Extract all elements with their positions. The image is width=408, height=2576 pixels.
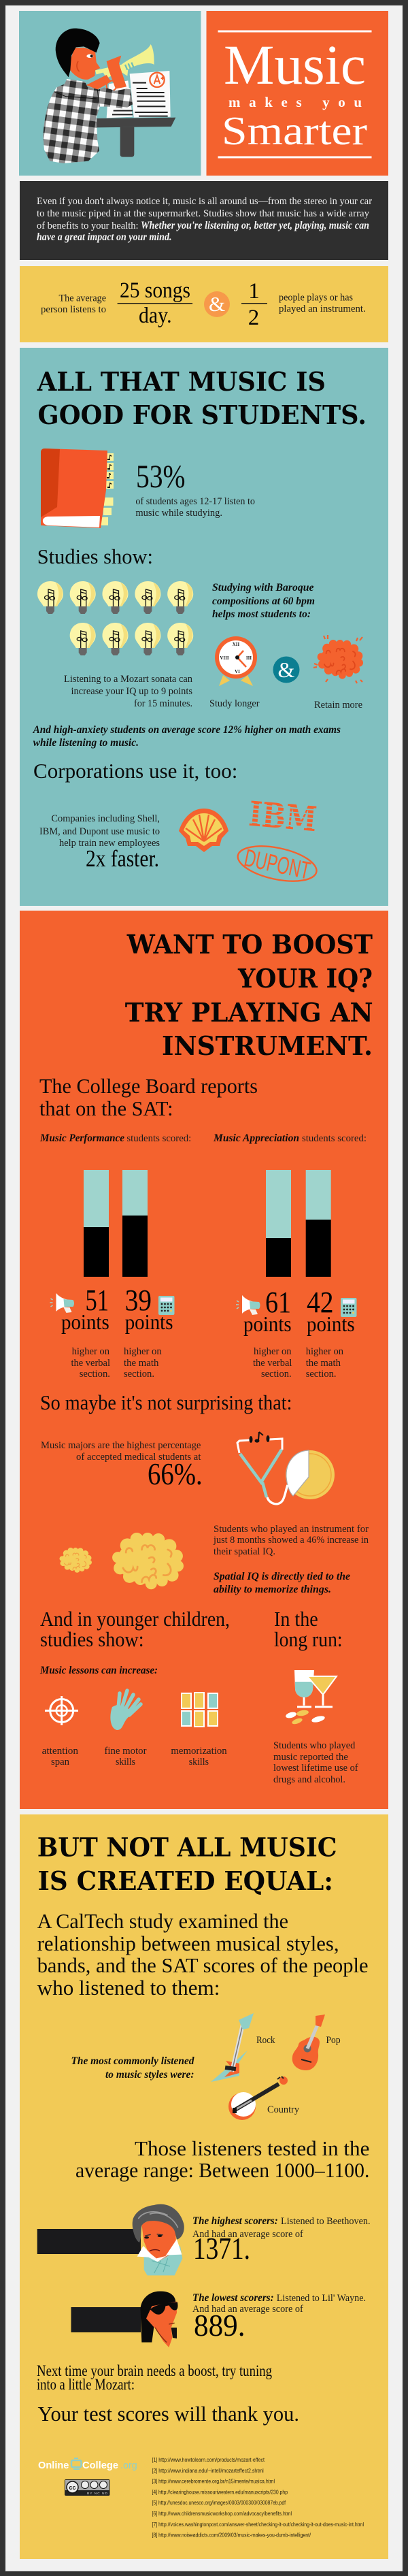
illustration: boy playing trumpet xyxy=(43,29,175,163)
stat: 42 points: the math xyxy=(306,1358,341,1369)
text: memorization: memorization xyxy=(171,1746,227,1757)
stat: 53% xyxy=(135,459,255,519)
panel: stats xyxy=(20,266,388,342)
text: plays instrument xyxy=(279,293,366,314)
text: high anxiety: And high-anxiety students on average score 12% higher on math exams xyxy=(33,724,341,736)
logo: OnlineCollege.org: .org xyxy=(120,2460,137,2471)
icon: clock: XII xyxy=(233,642,240,647)
text: spatial IQ: just 8 months showed a 46% increase in xyxy=(213,1535,369,1546)
heading: long run: long run: xyxy=(274,1627,343,1651)
references: [2] http://www.indiana.edu/~intell/mozarteffect2.shtml xyxy=(152,2468,264,2474)
panel: intro xyxy=(20,181,388,260)
panel: good for students xyxy=(20,348,388,906)
heading: corporations: Corporations use it, too: xyxy=(33,759,237,783)
stat: 51 points: the verbal xyxy=(71,1358,110,1369)
text: Baroque: Studying with Baroque xyxy=(212,582,314,593)
icon: pop guitar xyxy=(292,2015,325,2070)
text: spatial IQ: their spatial IQ. xyxy=(214,1546,275,1557)
text: lowest scorers: Listened to Lil' Wayne. xyxy=(277,2293,366,2304)
panel: header illustration xyxy=(19,11,201,176)
badge: creative commons xyxy=(65,2479,110,2496)
text: study longer: Study longer xyxy=(209,698,260,709)
badge: creative commons: BY NC ND xyxy=(87,2492,108,2496)
heading: College Board xyxy=(39,1074,258,1120)
icon: ampersand: & xyxy=(209,292,225,316)
icon: banjo xyxy=(228,2076,288,2120)
heading: BUT NOT ALL MUSIC xyxy=(37,1832,337,1863)
references: [8] http://www.noiseaddicts.com/2009/03/music-makes-you-dumb-intelligent/ xyxy=(152,2532,311,2539)
icon: clock: III xyxy=(246,655,252,661)
heading: long run xyxy=(274,1607,343,1651)
illustration: Lil Wayne xyxy=(141,2292,177,2347)
stat: 42 points: points xyxy=(307,1311,355,1336)
heading: GOOD FOR STUDENTS. xyxy=(38,400,367,430)
text: average range: Those listeners tested in the xyxy=(135,2136,369,2160)
references: [7] http://voices.washingtonpost.com/answer-sheet/checking-it-out/checking-it-out-does-music-int.html xyxy=(152,2522,364,2528)
icon: small brain xyxy=(59,1548,92,1573)
text: appreciation label xyxy=(213,1132,367,1144)
text: fine motor xyxy=(105,1746,147,1767)
stat: 39 points: the math xyxy=(124,1358,159,1369)
text: Mozart sonata xyxy=(64,674,192,709)
stat: 39 points: points xyxy=(125,1309,173,1334)
text: music majors: of accepted medical students at xyxy=(76,1452,201,1463)
icon: target xyxy=(45,1696,78,1725)
text: CalTech: who listened to them: xyxy=(37,1976,220,2000)
fraction: 25 songs per day: day. xyxy=(139,304,172,328)
heading: TRY PLAYING AN xyxy=(125,997,373,1028)
heading: INSTRUMENT. xyxy=(162,1030,373,1061)
stat: 42 points: section. xyxy=(306,1369,336,1380)
text: plays instrument: played an instrument. xyxy=(279,304,366,314)
text: high anxiety: while listening to music. xyxy=(33,737,139,749)
icon: clock: VIII xyxy=(220,655,229,661)
text: attention span: span xyxy=(51,1757,69,1767)
bar: Lil Wayne score xyxy=(71,2307,141,2332)
text: spatial IQ: ability to memorize things. xyxy=(214,1584,331,1595)
text: music majors: Music majors are the highest percentage xyxy=(41,1440,201,1451)
text: average person xyxy=(41,293,106,315)
text: common styles: The most commonly listened xyxy=(71,2055,194,2067)
text: memorization: skills xyxy=(189,1757,209,1767)
text: lifetime use: drugs and alcohol. xyxy=(273,1774,345,1785)
heading: ALL THAT MUSIC IS xyxy=(37,366,326,397)
icon: stethoscope and pie xyxy=(237,1432,335,1504)
text: country: Country xyxy=(267,2104,299,2115)
bar: Beethoven score xyxy=(37,2229,141,2254)
stat: 39 points: higher on xyxy=(124,1346,162,1357)
icon: calculator xyxy=(158,1296,174,1315)
stat: 61 points: the verbal xyxy=(253,1358,292,1369)
text: average person: person listens to xyxy=(41,304,106,315)
icon: megaphone xyxy=(50,1293,74,1313)
text: common styles xyxy=(71,2055,194,2081)
stat: 61 points: points xyxy=(243,1311,292,1336)
text: appreciation label: students scored: xyxy=(302,1133,367,1144)
stat: 39 points xyxy=(124,1284,173,1380)
illustration: Beethoven xyxy=(133,2204,184,2275)
logo: OnlineCollege.org xyxy=(38,2458,137,2471)
text: music majors xyxy=(41,1440,203,1491)
panel: title xyxy=(207,11,388,176)
icon: Shell logo xyxy=(179,809,228,852)
text: lowest scorers: 889. xyxy=(194,2308,245,2343)
bar chart: SAT scores xyxy=(84,1170,331,1277)
heading: younger children xyxy=(40,1607,230,1651)
text: Baroque: helps most students to: xyxy=(212,608,311,620)
text: performance label: students scored: xyxy=(126,1133,191,1144)
stat: 61 points: higher on xyxy=(254,1346,292,1357)
references xyxy=(152,2457,364,2539)
icon: calculator xyxy=(341,1298,356,1317)
panel: intro: Whether you're listening or, better yet, playing, music can xyxy=(141,220,369,231)
text: spatial IQ xyxy=(213,1524,369,1595)
text: CalTech: A CalTech study examined the xyxy=(37,1909,288,1933)
icon: megaphone xyxy=(236,1295,260,1315)
stat: 51 points xyxy=(61,1284,110,1380)
stat: 53%: of students ages 12-17 listen to xyxy=(135,496,255,507)
text: average range xyxy=(75,2136,369,2182)
icon: DuPont logo xyxy=(235,840,320,887)
stat: 42 points: 42 xyxy=(307,1286,334,1319)
text: Baroque xyxy=(212,582,315,620)
icon: light bulbs xyxy=(37,581,193,655)
text: next time: Next time your brain needs a boost, try tuning xyxy=(37,2362,272,2379)
text: lifetime use: Students who played xyxy=(273,1740,356,1751)
text: spatial IQ: Spatial IQ is directly tied to the xyxy=(214,1571,350,1582)
text: companies: Companies including Shell, xyxy=(51,813,160,824)
text: attention span: attention xyxy=(42,1746,78,1757)
text: CalTech: relationship between musical styles, xyxy=(37,1931,339,1955)
icon: clock: VI xyxy=(235,669,240,674)
heading: studies show: Studies show: xyxy=(37,544,153,568)
stat: 53%: music while studying. xyxy=(135,508,222,519)
text: lowest scorers xyxy=(192,2292,366,2343)
panel: not all music xyxy=(20,1814,388,2559)
text: attention span xyxy=(42,1746,78,1767)
text: companies: help train new employees xyxy=(59,838,160,849)
heading: WANT TO BOOST xyxy=(126,929,373,960)
icon: ampersand xyxy=(273,656,299,683)
badge: creative commons: cc xyxy=(69,2484,76,2491)
panel: boost your IQ xyxy=(20,911,388,1809)
stat: 53%: 53% xyxy=(136,459,185,495)
stat: 39 points: section. xyxy=(124,1369,154,1380)
stat: 42 points: higher on xyxy=(306,1346,343,1357)
logo: OnlineCollege.org: Online xyxy=(38,2460,69,2471)
heading: long run: In the xyxy=(274,1607,318,1631)
references: [1] http://www.howtolearn.com/products/mozart-effect xyxy=(152,2457,265,2463)
text: test scores: Your test scores will thank you. xyxy=(38,2402,299,2426)
icon: DuPont logo: DUPONT xyxy=(242,843,313,885)
text: CalTech xyxy=(37,1909,368,2000)
text: memorization xyxy=(171,1746,227,1767)
icon: rock guitar xyxy=(211,2013,254,2082)
text: performance label: Music Performance xyxy=(39,1132,124,1144)
text: Mozart sonata: increase your IQ up to 9 points xyxy=(71,686,192,697)
text: Baroque: compositions at 60 bpm xyxy=(212,596,315,607)
text: high anxiety xyxy=(33,724,341,749)
stat: 51 points: points xyxy=(61,1309,109,1334)
text: lifetime use xyxy=(273,1740,358,1785)
text: appreciation label: Music Appreciation xyxy=(213,1132,299,1144)
text: Mozart sonata: for 15 minutes. xyxy=(134,698,192,709)
panel: intro: of benefits to your health: xyxy=(37,221,139,231)
heading xyxy=(125,929,373,1061)
text: highest scorers xyxy=(192,2215,371,2266)
text: spatial IQ: Students who played an instrument for xyxy=(214,1524,369,1535)
stat: 39 points: 39 xyxy=(125,1284,152,1317)
fraction: one half: 1 xyxy=(248,279,260,304)
text: highest scorers: The highest scorers: xyxy=(192,2215,278,2227)
text: music majors: 66%. xyxy=(148,1456,203,1491)
fraction: 25 songs per day: 25 songs xyxy=(120,278,190,303)
heading xyxy=(37,1832,337,1896)
references: [6] http://www.childrensmusicworkshop.com/advocacy/benefits.html xyxy=(152,2511,292,2517)
text: lifetime use: music reported the xyxy=(273,1752,348,1763)
subtitle: makes you: makes you xyxy=(228,94,362,110)
icon: ampersand xyxy=(204,291,230,317)
icon: brain xyxy=(313,635,363,683)
text: fine motor: fine motor xyxy=(105,1746,147,1757)
text: retain more: Retain more xyxy=(314,700,362,711)
text: companies: IBM, and Dupont use music to xyxy=(39,826,160,837)
text: lowest scorers: And had an average score of xyxy=(192,2304,303,2315)
panel: intro: to the music piped in at the supermarket. Studies show that music has a wide array xyxy=(37,208,369,219)
text: average range: average range: Between 1000–1100. xyxy=(75,2158,369,2182)
heading: younger children: And in younger children, xyxy=(40,1607,230,1631)
title: Smarter: Smarter xyxy=(222,108,367,153)
stat: 51 points: 51 xyxy=(86,1284,109,1317)
heading: IS CREATED EQUAL: xyxy=(38,1865,333,1896)
stat: 61 points: section. xyxy=(261,1369,292,1380)
fraction: one half: 2 xyxy=(248,306,259,330)
panel: intro: have a great impact on your mind. xyxy=(37,231,171,243)
stat: 61 points: 61 xyxy=(265,1286,291,1319)
stat: 51 points: section. xyxy=(80,1369,110,1380)
text: average person: The average xyxy=(58,293,106,304)
icon: IBM logo: IBM xyxy=(248,794,318,839)
heading: so maybe: So maybe it's not surprising that: xyxy=(40,1390,292,1414)
stat: 42 points xyxy=(306,1286,355,1380)
references: [4] http://clearinghouse.missouriwestern.edu/manuscripts/230.php xyxy=(152,2489,288,2495)
heading: younger children: studies show: xyxy=(40,1627,144,1651)
fraction: one half xyxy=(241,279,267,330)
text: highest scorers: Listened to Beethoven. xyxy=(281,2216,371,2227)
panel: intro: Even if you don't always notice it, music is all around us—from the stereo in your car xyxy=(37,196,372,207)
references: [3] http://www.cerebromente.org.br/n15/mente/musica.html xyxy=(152,2479,275,2485)
text: CalTech: bands, and the SAT scores of the people xyxy=(37,1953,368,1977)
text: highest scorers: 1371. xyxy=(193,2231,250,2266)
text: companies: 2x faster. xyxy=(86,845,159,872)
text: Mozart sonata: Listening to a Mozart sonata can xyxy=(64,674,192,685)
text: lessons: Music lessons can increase: xyxy=(39,1665,158,1676)
text: plays instrument: people plays or has xyxy=(279,293,353,304)
text: companies xyxy=(39,813,160,872)
text: highest scorers: And had an average score of xyxy=(192,2229,303,2240)
title: Music: Music xyxy=(224,33,366,96)
icon: ampersand: & xyxy=(278,657,295,682)
fraction: 25 songs per day xyxy=(118,278,192,328)
icon: hand xyxy=(110,1691,141,1730)
icon: memory cards xyxy=(182,1693,218,1727)
text: pop: Pop xyxy=(326,2035,341,2046)
stat: 51 points: higher on xyxy=(72,1346,109,1357)
stat: 61 points xyxy=(243,1286,292,1380)
text: fine motor: skills xyxy=(116,1757,135,1767)
heading: College Board: The College Board reports xyxy=(39,1074,258,1098)
text: lowest scorers: The lowest scorers: xyxy=(192,2292,274,2304)
icon: clock xyxy=(215,636,257,686)
text: lifetime use: lowest lifetime use of xyxy=(273,1763,358,1774)
heading: College Board: that on the SAT: xyxy=(39,1096,173,1120)
icon: drinks and pills xyxy=(285,1670,337,1725)
text: next time xyxy=(37,2362,272,2393)
text: rock: Rock xyxy=(256,2035,275,2046)
logo: OnlineCollege.org: College xyxy=(82,2460,118,2471)
text: performance label xyxy=(39,1132,191,1144)
heading: YOUR IQ? xyxy=(237,963,373,994)
heading xyxy=(37,366,367,430)
text: next time: into a little Mozart: xyxy=(37,2376,135,2393)
icon: large brain xyxy=(112,1533,184,1589)
text: common styles: to music styles were: xyxy=(105,2069,194,2081)
icon: book xyxy=(41,449,114,528)
references: [5] http://unesdoc.unesco.org/images/0003/000300/030087eb.pdf xyxy=(152,2500,286,2506)
